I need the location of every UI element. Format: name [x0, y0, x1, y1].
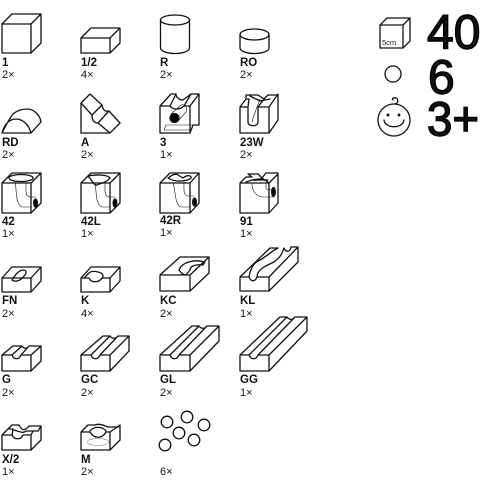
- stat: 40 cubes: 40: [427, 6, 480, 60]
- piece GC: medium groove: [81, 336, 129, 399]
- piece 1/2: half cube: 1/2: [81, 57, 97, 69]
- piece GL: long groove: 2×: [160, 387, 173, 399]
- piece KL: long curved groove: [240, 247, 298, 320]
- piece 42: tower with outlet: [2, 173, 41, 240]
- piece A: angled block: A: [81, 137, 89, 149]
- stat: 40 cubes: [380, 6, 480, 60]
- piece FN: flat with notch: 2×: [2, 308, 15, 320]
- piece GL: long groove: [160, 326, 219, 399]
- piece R: cylinder: R: [160, 57, 169, 69]
- piece X/2: crossing: 1×: [2, 466, 15, 478]
- piece 1: cube: 1: [2, 57, 9, 69]
- piece RO: short cylinder: 2×: [240, 69, 253, 81]
- piece G: short groove: 2×: [2, 387, 15, 399]
- marbles group: [159, 411, 210, 478]
- stat: 6 marbles: [385, 52, 455, 104]
- piece 42L: tower left curve: 1×: [81, 228, 94, 240]
- piece 23W: block with vertical chute: 23W: [240, 137, 264, 149]
- piece 42L: tower left curve: [81, 173, 120, 240]
- stat: 40 cubes: 5cm: [382, 38, 396, 47]
- piece X/2: crossing: [2, 425, 41, 478]
- piece 3: block with ball run: 1×: [160, 149, 173, 161]
- piece 42L: tower left curve: 42L: [81, 216, 101, 228]
- piece 23W: block with vertical chute: 2×: [240, 149, 253, 161]
- piece 23W: block with vertical chute: [240, 94, 278, 161]
- piece GL: long groove: GL: [160, 374, 176, 386]
- piece R: cylinder: [160, 15, 190, 81]
- piece M: multi junction: 2×: [81, 466, 94, 478]
- stat: 6 marbles: 6: [428, 52, 455, 104]
- piece K: flat with curve: 4×: [81, 308, 94, 320]
- piece RD: half round: 2×: [2, 149, 15, 161]
- piece K: flat with curve: [81, 267, 120, 320]
- piece A: angled block: [81, 94, 120, 161]
- piece RD: half round: [2, 109, 41, 161]
- piece GC: medium groove: 2×: [81, 387, 94, 399]
- piece 1: cube: 2×: [2, 69, 15, 81]
- piece 42R: tower right curve: [160, 173, 199, 239]
- piece RO: short cylinder: RO: [240, 57, 257, 69]
- piece GG: extra long groove: 1×: [240, 387, 253, 399]
- piece 1/2: half cube: 4×: [81, 69, 94, 81]
- piece X/2: crossing: X/2: [2, 454, 19, 466]
- piece 42R: tower right curve: 42R: [160, 215, 182, 227]
- stat: age 3+: [378, 94, 479, 146]
- piece KL: long curved groove: 1×: [240, 308, 253, 320]
- piece G: short groove: [2, 346, 41, 399]
- piece 91: tower with junction: 91: [240, 216, 253, 228]
- piece 3: block with ball run: 3: [160, 137, 166, 149]
- piece 91: tower with junction: [240, 173, 278, 240]
- piece 42: tower with outlet: 42: [2, 216, 15, 228]
- piece 91: tower with junction: 1×: [240, 228, 253, 240]
- piece FN: flat with notch: [2, 267, 41, 320]
- piece RD: half round: RD: [2, 137, 19, 149]
- piece G: short groove: G: [2, 374, 11, 386]
- piece 1: cube: [2, 14, 41, 81]
- piece GC: medium groove: GC: [81, 374, 98, 386]
- piece KC: flat with curved groove: [160, 257, 209, 320]
- piece GG: extra long groove: [240, 317, 307, 399]
- piece KL: long curved groove: KL: [240, 295, 255, 307]
- piece 3: block with ball run: [160, 94, 199, 161]
- piece FN: flat with notch: FN: [2, 295, 17, 307]
- piece 1/2: half cube: [81, 28, 120, 81]
- piece 42R: tower right curve: 1×: [160, 227, 173, 239]
- piece RO: short cylinder: [240, 29, 269, 81]
- stat: age 3+: 3+: [427, 94, 479, 146]
- piece R: cylinder: 2×: [160, 69, 173, 81]
- piece KC: flat with curved groove: KC: [160, 295, 177, 307]
- piece M: multi junction: M: [81, 454, 91, 466]
- piece 42: tower with outlet: 1×: [2, 228, 15, 240]
- piece KC: flat with curved groove: 2×: [160, 308, 173, 320]
- piece M: multi junction: [81, 424, 120, 478]
- marbles group: 6×: [160, 466, 173, 478]
- piece GG: extra long groove: GG: [240, 374, 258, 386]
- piece A: angled block: 2×: [81, 149, 94, 161]
- piece K: flat with curve: K: [81, 295, 90, 307]
